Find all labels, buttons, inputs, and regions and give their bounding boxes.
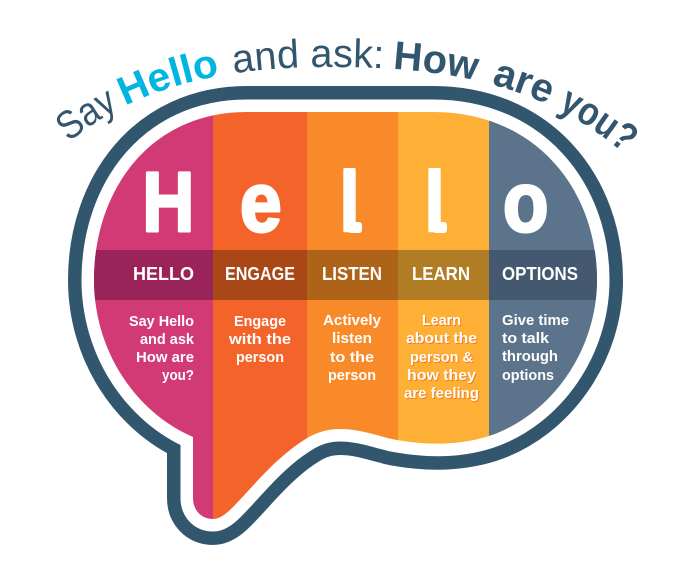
text: engage column xyxy=(228,313,291,366)
text: hello column: How are xyxy=(136,349,194,366)
title: are xyxy=(494,66,552,102)
colored columns xyxy=(90,105,601,525)
text: learn column: are feeling xyxy=(404,385,479,402)
title xyxy=(56,38,638,148)
big Hello letters: l xyxy=(425,154,444,249)
column headings: OPTIONS xyxy=(502,264,578,284)
text: options column xyxy=(502,312,569,384)
text: options column: through xyxy=(502,348,558,365)
text: listen column: to the xyxy=(330,349,374,366)
title: Say xyxy=(56,90,114,138)
text: hello column: Say Hello xyxy=(129,313,194,330)
title: Hello xyxy=(116,54,216,104)
column headings: ENGAGE xyxy=(225,264,295,284)
text: learn column xyxy=(404,312,479,402)
text: hello column: and ask xyxy=(140,331,195,348)
column headings: HELLO xyxy=(133,264,194,284)
title: and ask: xyxy=(234,38,381,73)
text: engage column: person xyxy=(236,349,284,366)
text: learn column: about the xyxy=(406,330,477,347)
text: options column: options xyxy=(502,367,554,384)
text: learn column: how they xyxy=(407,367,477,384)
big Hello letters: o xyxy=(503,155,548,249)
text: engage column: Engage xyxy=(234,313,286,330)
text: listen column xyxy=(323,312,382,384)
column headings: LISTEN xyxy=(322,264,382,284)
text: listen column: listen xyxy=(332,330,372,347)
dark label band xyxy=(90,250,601,300)
speech bubble outline xyxy=(94,112,597,519)
text: engage column: with the xyxy=(228,331,291,348)
big Hello letters: H xyxy=(142,155,194,249)
text: options column: to talk xyxy=(502,330,550,347)
text: learn column: Learn xyxy=(422,312,461,329)
text: listen column: person xyxy=(328,367,376,384)
big Hello letters xyxy=(142,154,548,249)
column headings: LEARN xyxy=(412,264,470,284)
big Hello letters: l xyxy=(340,154,359,249)
column headings xyxy=(133,264,578,284)
title: How xyxy=(395,42,480,80)
text: hello column: you? xyxy=(162,367,194,384)
text: options column: Give time xyxy=(502,312,569,329)
big Hello letters: e xyxy=(240,155,282,249)
text: listen column: Actively xyxy=(323,312,382,329)
text: learn column: person & xyxy=(410,349,473,366)
text: hello column xyxy=(129,313,195,384)
title: you? xyxy=(555,90,638,148)
